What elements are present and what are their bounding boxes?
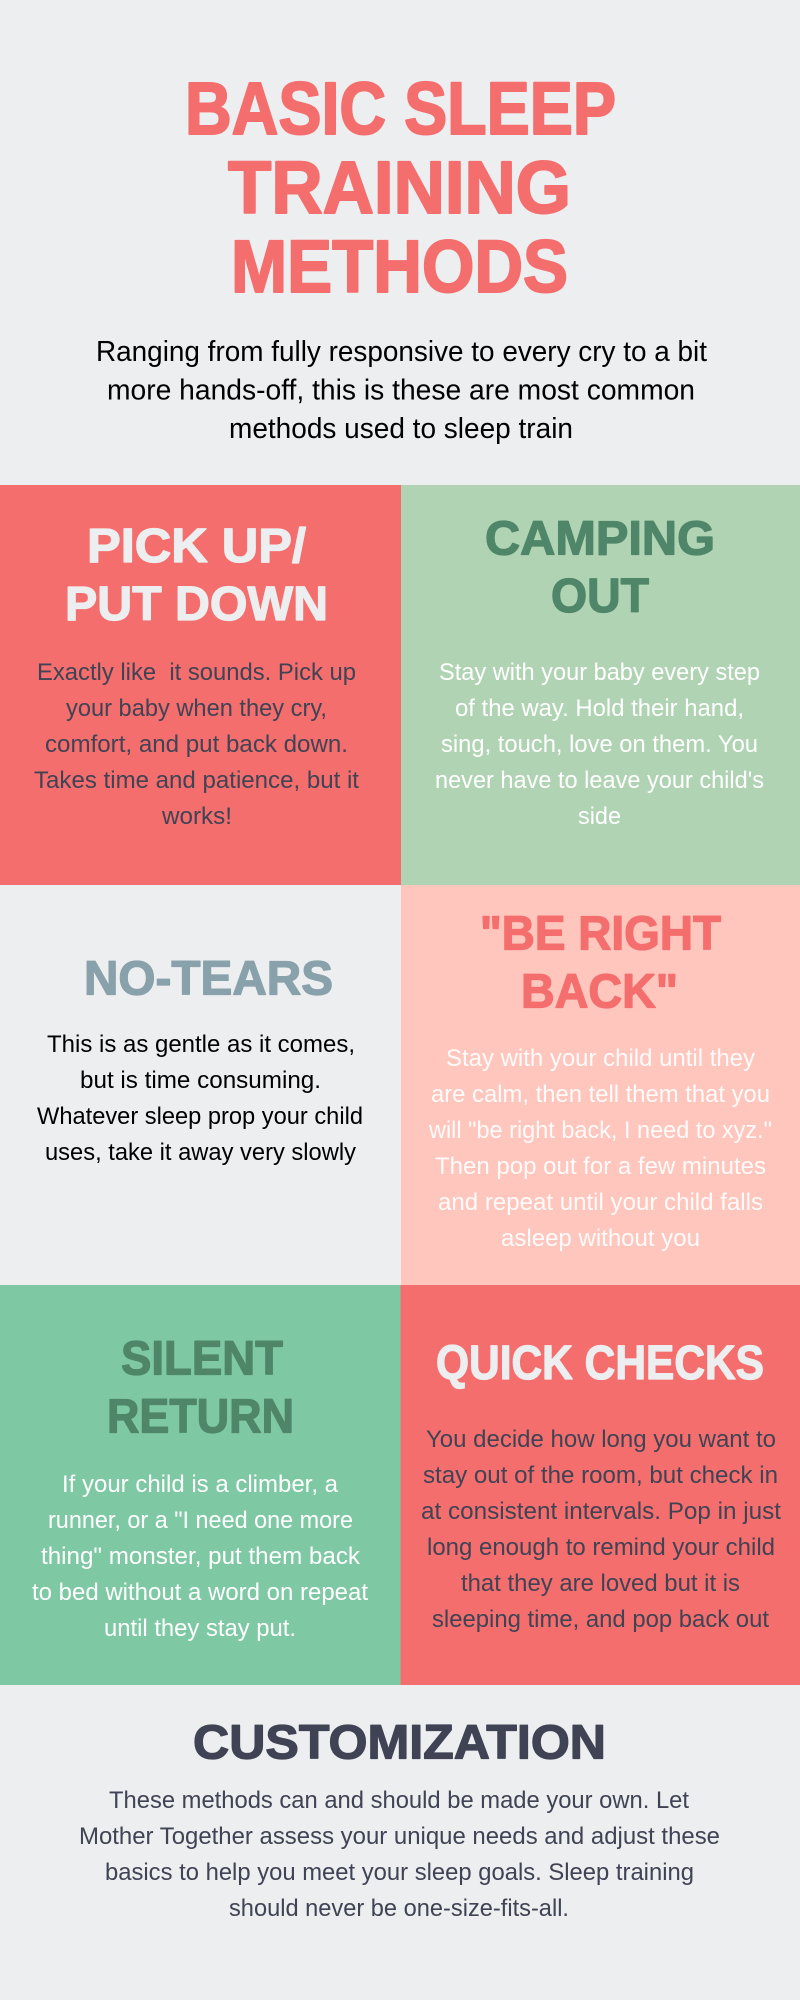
body: pick up / put down: works! <box>161 803 232 830</box>
body: silent return: to bed without a word on repeat <box>32 1579 368 1606</box>
heading: silent return: SILENT <box>121 1332 283 1386</box>
body: be right back: and repeat until your child falls <box>438 1189 763 1216</box>
body: pick up / put down: Exactly like it sounds. Pick up <box>37 659 356 686</box>
body: camping out <box>435 659 764 830</box>
title <box>185 67 616 308</box>
body: be right back: asleep without you <box>501 1225 700 1252</box>
body: be right back: Then pop out for a few minutes <box>435 1153 766 1180</box>
title: TRAINING <box>228 146 571 229</box>
body: pick up / put down: your baby when they cry, <box>66 695 327 722</box>
heading: silent return: RETURN <box>107 1390 294 1444</box>
intro text: more hands-off, this is these are most common <box>107 374 695 406</box>
heading: pick up / put down <box>65 519 328 631</box>
body: no-tears <box>37 1031 363 1166</box>
body: camping out: of the way. Hold their hand, <box>455 695 744 722</box>
title: BASIC SLEEP <box>185 67 616 150</box>
body: be right back: will "be right back, I need to xyz." <box>428 1117 772 1144</box>
body: be right back: Stay with your child until they <box>446 1045 756 1072</box>
body: silent return: If your child is a climber, a <box>62 1471 338 1498</box>
body: quick checks <box>421 1426 781 1633</box>
body: no-tears: Whatever sleep prop your child <box>37 1103 363 1130</box>
heading: be right back: BACK" <box>521 964 678 1018</box>
heading: camping out <box>485 512 715 623</box>
body: quick checks: long enough to remind your child <box>427 1534 775 1561</box>
body: camping out: side <box>578 803 621 830</box>
body: pick up / put down: Takes time and patience, but it <box>34 767 359 794</box>
body: be right back <box>428 1045 772 1252</box>
body: camping out: sing, touch, love on them. You <box>441 731 758 758</box>
heading: pick up / put down: PUT DOWN <box>65 577 328 631</box>
heading: camping out: OUT <box>551 569 649 623</box>
panel: customization <box>0 1685 800 2000</box>
body: no-tears: uses, take it away very slowly <box>45 1139 357 1166</box>
heading: quick checks: QUICK CHECKS <box>436 1336 764 1390</box>
heading: customization: CUSTOMIZATION <box>193 1716 606 1770</box>
intro text <box>96 336 707 445</box>
title: METHODS <box>231 225 568 308</box>
heading: silent return <box>107 1332 294 1444</box>
body: silent return: runner, or a "I need one more <box>48 1507 353 1534</box>
intro text: Ranging from fully responsive to every cry to a bit <box>96 336 707 368</box>
body: camping out: Stay with your baby every step <box>439 659 760 686</box>
panel: no-tears <box>0 885 401 1285</box>
body: camping out: never have to leave your child's <box>435 767 764 794</box>
body: customization <box>79 1787 720 1922</box>
heading: be right back <box>480 906 721 1018</box>
heading: pick up / put down: PICK UP/ <box>87 519 306 573</box>
panel: camping out <box>401 485 800 885</box>
body: silent return <box>32 1471 368 1642</box>
body: no-tears: but is time consuming. <box>80 1067 321 1094</box>
body: quick checks: stay out of the room, but check in <box>423 1462 778 1489</box>
body: quick checks: that they are loved but it is <box>461 1570 740 1597</box>
body: silent return: until they stay put. <box>104 1615 296 1642</box>
heading: camping out: CAMPING <box>485 512 715 566</box>
panel: pick up / put down <box>0 485 401 885</box>
body: no-tears: This is as gentle as it comes, <box>47 1031 355 1058</box>
body: be right back: are calm, then tell them that you <box>431 1081 770 1108</box>
panel: silent return <box>0 1285 401 1685</box>
body: quick checks: sleeping time, and pop back out <box>432 1606 769 1633</box>
body: customization: These methods can and should be made your own. Let <box>109 1787 689 1814</box>
body: customization: Mother Together assess your unique needs and adjust these <box>79 1823 720 1850</box>
panel: be right back <box>401 885 800 1285</box>
heading: no-tears: NO-TEARS <box>84 952 333 1006</box>
body: quick checks: at consistent intervals. Pop in just <box>421 1498 781 1525</box>
body: pick up / put down: comfort, and put back down. <box>45 731 348 758</box>
panel: quick checks <box>400 1285 800 1685</box>
body: customization: should never be one-size-fits-all. <box>229 1895 569 1922</box>
intro text: methods used to sleep train <box>229 413 573 445</box>
body: pick up / put down <box>34 659 359 830</box>
body: quick checks: You decide how long you want to <box>426 1426 776 1453</box>
body: silent return: thing" monster, put them back <box>41 1543 361 1570</box>
body: customization: basics to help you meet your sleep goals. Sleep training <box>105 1859 694 1886</box>
heading: be right back: "BE RIGHT <box>480 906 721 960</box>
